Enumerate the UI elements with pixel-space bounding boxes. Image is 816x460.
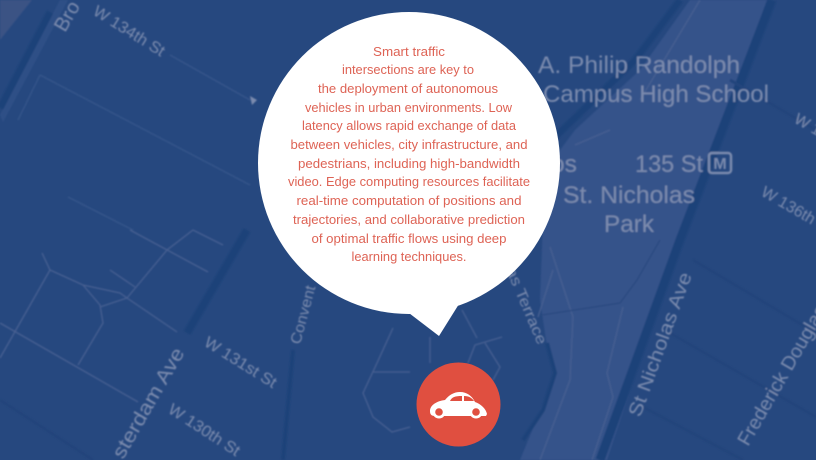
bubble text: intersections are key to: [342, 63, 474, 77]
bubble text: of optimal traffic flows using deep: [312, 232, 506, 246]
icon: car badge: [416, 362, 500, 446]
speech bubble: [258, 12, 560, 336]
bubble text: latency allows rapid exchange of data: [302, 119, 516, 133]
bubble text: the deployment of autonomous: [318, 82, 498, 96]
bubble text: Smart traffic: [373, 45, 445, 59]
map labels: sterdam Ave: [108, 344, 189, 460]
map labels: Park: [604, 211, 655, 238]
map labels: A. Philip Randolph: [538, 52, 740, 79]
map labels: W 131st St: [201, 334, 280, 392]
bubble text: pedestrians, including high-bandwidth: [298, 157, 520, 171]
map labels: St. Nicholas: [563, 182, 695, 209]
map labels: M: [713, 156, 727, 173]
icon: car: [430, 392, 487, 418]
bubble text: [288, 45, 530, 264]
map labels: Convent: [287, 283, 320, 346]
bubble text: learning techniques.: [352, 250, 466, 264]
map labels: as Terrace: [502, 265, 550, 347]
bubble text: vehicles in urban environments. Low: [305, 101, 513, 115]
map labels: 135 St: [635, 151, 703, 178]
bubble text: between vehicles, city infrastructure, and: [290, 138, 528, 152]
bubble text: video. Edge computing resources facilitate: [288, 175, 530, 189]
map labels: W 134th St: [90, 3, 168, 61]
map labels: Campus High School: [543, 81, 769, 108]
bubble text: trajectories, and collaborative prediction: [293, 213, 525, 227]
map labels: W 130th St: [165, 401, 243, 460]
map labels: os: [551, 151, 577, 178]
bubble text: real-time computation of positions and: [296, 194, 522, 208]
map labels: St Nicholas Ave: [625, 270, 697, 420]
